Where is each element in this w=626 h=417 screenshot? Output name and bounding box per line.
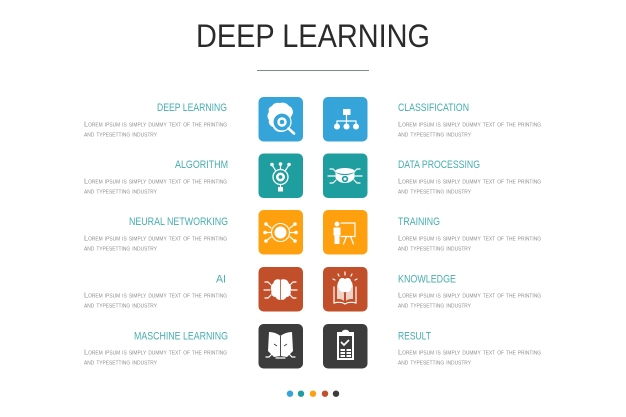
text block: knowledge: [398, 274, 541, 310]
icon: clipboard checklist: [323, 324, 368, 368]
text block: result: [398, 330, 541, 366]
icon: brain with magnifier: [258, 97, 303, 142]
text block: ai: and typesetting industry: [84, 300, 158, 310]
text block: data processing: DATA PROCESSING: [398, 159, 480, 171]
text block: maschine learning: MASCHINE LEARNING: [134, 330, 228, 342]
icon: book with brain: [323, 267, 368, 312]
text block: knowledge: KNOWLEDGE: [398, 274, 456, 286]
icon: book brain circuit: [258, 324, 303, 368]
text block: ai: AI: [216, 274, 226, 286]
pagination dots: [287, 390, 339, 397]
text block: training: TRAINING: [398, 216, 440, 228]
text block: neural networking: [84, 216, 228, 252]
text block: training: Lorem ipsum is simply dummy text of the printing: [398, 234, 541, 242]
text block: result: RESULT: [398, 330, 431, 342]
text block: classification: and typesetting industry: [398, 130, 472, 138]
text block: neural networking: and typesetting industry: [84, 244, 158, 252]
text block: algorithm: Lorem ipsum is simply dummy text of the printing: [84, 176, 227, 186]
text block: classification: [398, 102, 541, 138]
text block: result: Lorem ipsum is simply dummy text of the printing: [398, 348, 541, 356]
text block: knowledge: Lorem ipsum is simply dummy text of the printing: [398, 290, 541, 300]
text block: maschine learning: [84, 330, 228, 366]
icon: neural network brain: [258, 210, 303, 254]
text block: deep learning: Lorem ipsum is simply dummy text of the printing: [84, 120, 227, 128]
text block: classification: Lorem ipsum is simply dummy text of the printing: [398, 120, 541, 128]
icon: data processing: [323, 154, 368, 198]
text block: neural networking: Lorem ipsum is simply dummy text of the printing: [84, 234, 227, 242]
text block: ai: Lorem ipsum is simply dummy text of the printing: [84, 290, 227, 300]
icon: algorithm gear: [258, 154, 303, 198]
text block: algorithm: ALGORITHM: [175, 159, 228, 171]
icon: training presentation: [323, 210, 368, 254]
text block: maschine learning: Lorem ipsum is simply dummy text of the printing: [84, 348, 227, 356]
text block: deep learning: [84, 102, 227, 138]
icon: brain circuit: [258, 267, 303, 312]
text block: data processing: Lorem ipsum is simply dummy text of the printing: [398, 176, 541, 186]
text block: neural networking: NEURAL NETWORKING: [129, 216, 228, 228]
text block: deep learning: DEEP LEARNING: [157, 102, 227, 114]
text block: algorithm: and typesetting industry: [84, 186, 158, 196]
text block: data processing: and typesetting industry: [398, 186, 472, 196]
text block: knowledge: and typesetting industry: [398, 300, 472, 310]
title: DEEP LEARNING: [196, 18, 430, 54]
text block: deep learning: and typesetting industry: [84, 130, 158, 138]
text block: ai: [84, 274, 227, 310]
text block: data processing: [398, 159, 541, 196]
text block: algorithm: [84, 159, 228, 196]
text block: result: and typesetting industry: [398, 358, 472, 366]
text block: training: [398, 216, 541, 252]
text block: training: and typesetting industry: [398, 244, 472, 252]
text block: maschine learning: and typesetting industry: [84, 358, 158, 366]
text block: classification: CLASSIFICATION: [398, 102, 469, 114]
icon: hierarchy: [323, 97, 368, 142]
